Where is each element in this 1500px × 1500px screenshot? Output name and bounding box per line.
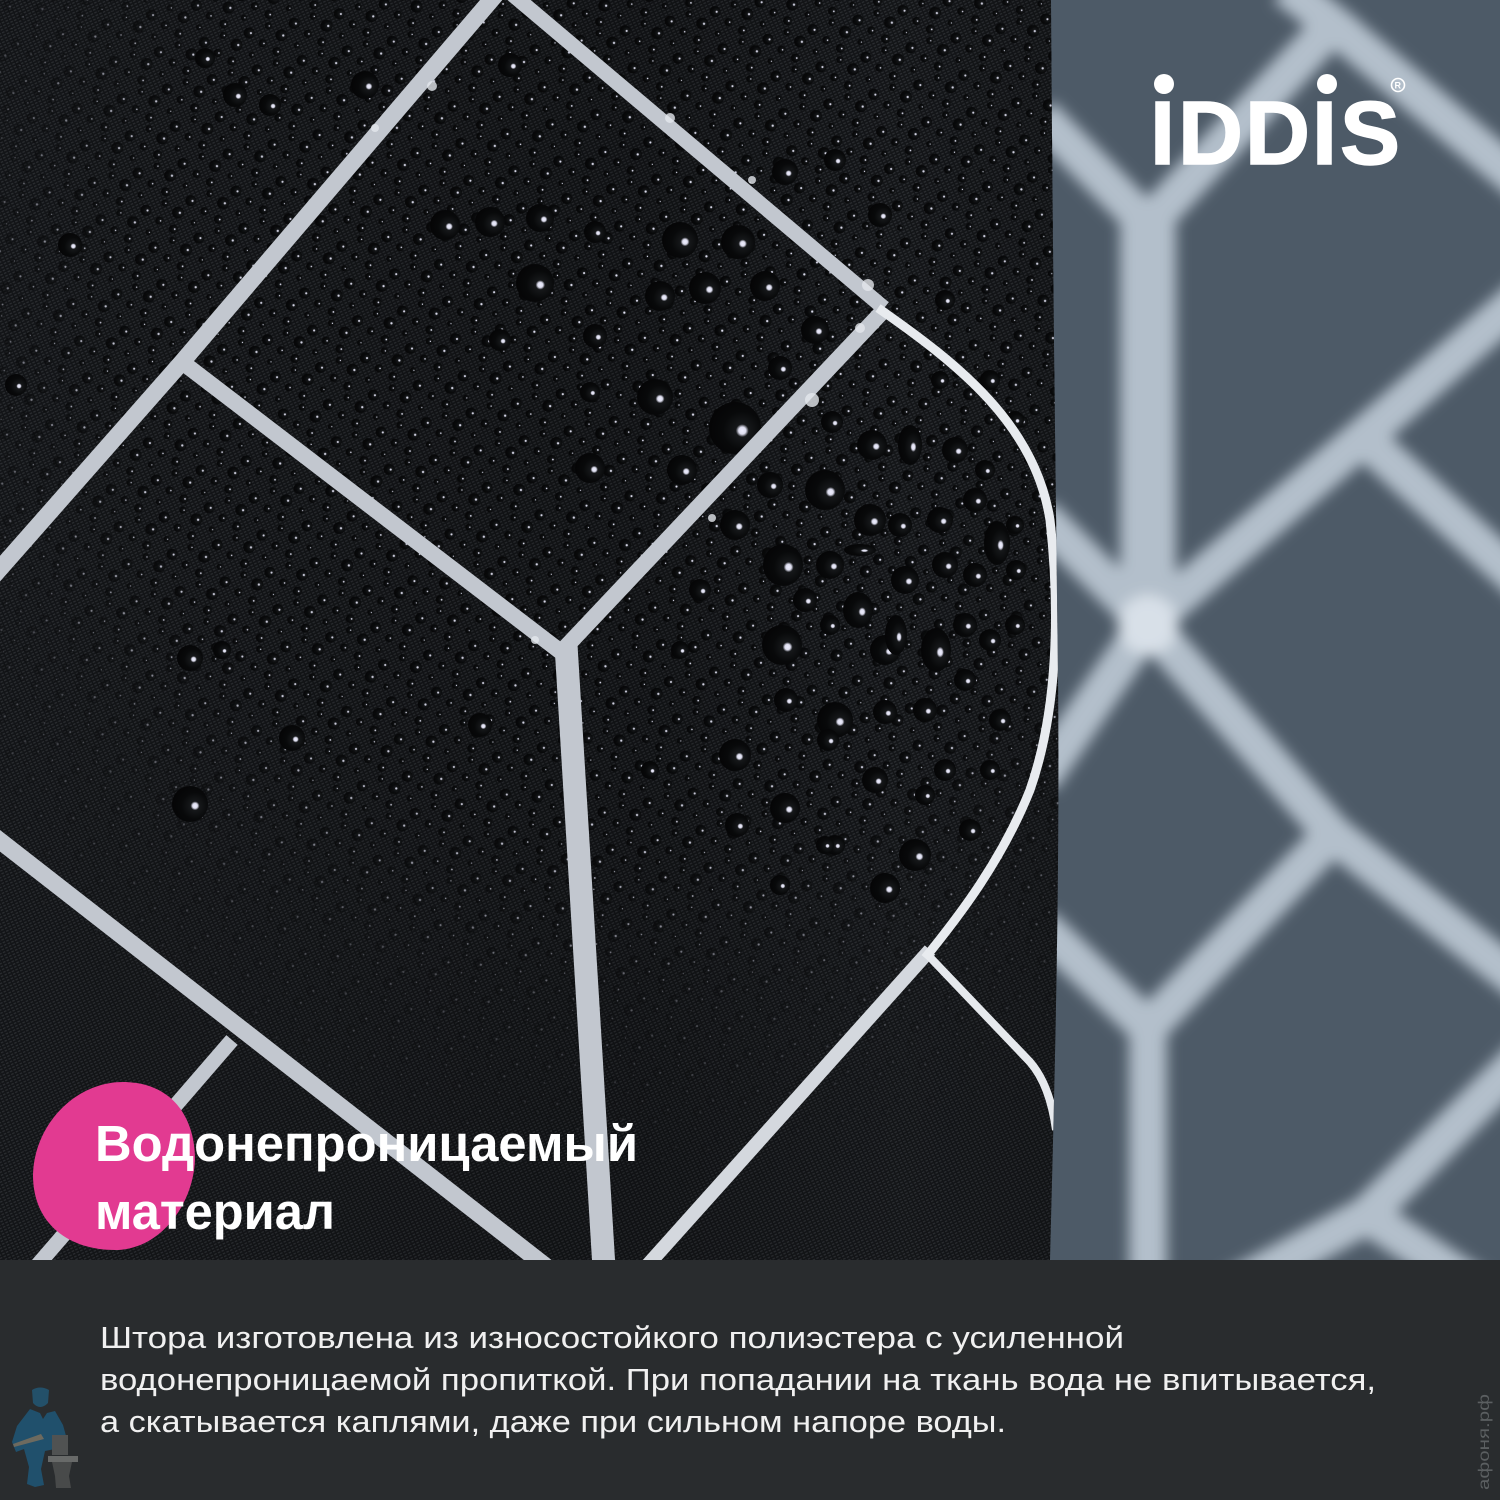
panel: bottom description band: [0, 1260, 1500, 1500]
text block: description: [100, 1320, 1376, 1439]
white printed geometric lines: [0, 0, 1056, 1268]
logo: iddis: S: [1340, 84, 1400, 184]
heading: материал: [95, 1183, 335, 1240]
logo: iddis: [1150, 74, 1404, 184]
logo: iddis: R: [1394, 80, 1402, 90]
panel: blurred background curtain: [1040, 0, 1500, 1290]
text block: description: Штора изготовлена из износостойкого полиэстера с усиленной: [100, 1320, 1124, 1355]
heading: [95, 1115, 638, 1240]
panel: dark waterproof fabric photo: [0, 0, 1062, 1268]
shine droplets on lines: [371, 81, 874, 644]
logo: iddis: I: [1312, 84, 1337, 184]
large water droplets: [5, 48, 1026, 903]
icon: plumber with toilet watermark: [12, 1388, 78, 1488]
text block: description: водонепроницаемой пропиткой. При попадании на ткань вода не впитывается,: [100, 1362, 1376, 1397]
accent: pink blob: [33, 1082, 195, 1250]
logo: iddis: D: [1245, 84, 1310, 184]
watermark: afonya.rf: афоня.рф: [1476, 1394, 1493, 1490]
text block: description: а скатывается каплями, даже при сильном напоре воды.: [100, 1404, 1006, 1439]
heading: Водонепроницаемый: [95, 1115, 638, 1172]
small water droplets: [0, 0, 1062, 1260]
logo: iddis: D: [1178, 84, 1243, 184]
logo: iddis: I: [1150, 84, 1175, 184]
